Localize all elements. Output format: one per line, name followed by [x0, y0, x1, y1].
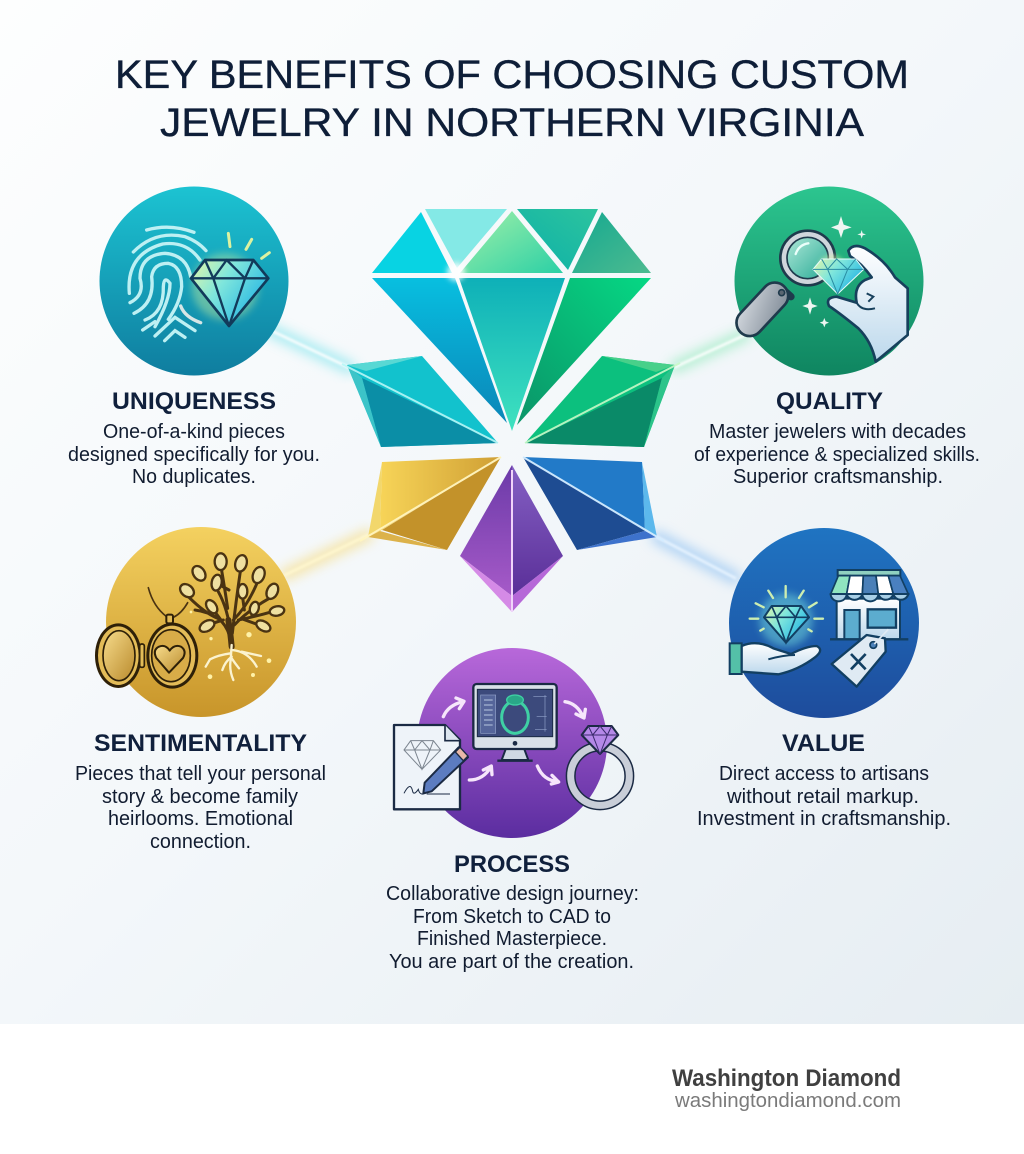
benefit: sentimentality: Pieces that tell your personal — [75, 763, 326, 785]
shard: quality green — [525, 356, 680, 447]
footer band — [0, 1024, 1024, 1154]
icon: process sketch to CAD to ring — [394, 648, 629, 838]
inspected diamond — [813, 254, 864, 294]
benefit: uniqueness — [68, 388, 320, 488]
diamond ring — [571, 726, 629, 805]
sparkle diamond — [191, 233, 269, 326]
open hand — [730, 643, 820, 674]
benefit: uniqueness: UNIQUENESS — [112, 388, 276, 415]
footer brand: washingtondiamond.com — [674, 1090, 901, 1112]
open locket — [95, 615, 198, 689]
benefit: sentimentality: story & become family — [102, 786, 298, 808]
footer brand: Washington Diamond — [672, 1065, 901, 1092]
title: KEY BENEFITS OF CHOOSING CUSTOM — [115, 53, 909, 97]
flow arrows — [443, 698, 585, 784]
price tag with cross — [832, 629, 888, 687]
benefit: uniqueness: designed specifically for you. — [68, 444, 320, 466]
glowing diamond — [750, 586, 823, 647]
benefit: value — [697, 730, 951, 830]
benefit: value: without retail markup. — [726, 786, 919, 808]
title — [115, 53, 909, 145]
benefit: sentimentality: connection. — [150, 831, 251, 853]
gloved hand — [828, 246, 908, 362]
benefit: process: From Sketch to CAD to — [413, 906, 611, 928]
shard: uniqueness teal — [342, 356, 498, 447]
icon: uniqueness fingerprint and diamond — [100, 186, 288, 376]
fingerprint — [129, 227, 206, 341]
sketch paper with pencil — [394, 725, 468, 809]
shard: process purple — [460, 465, 563, 612]
benefit: quality: Master jewelers with decades — [709, 421, 966, 443]
benefit: quality: QUALITY — [776, 388, 883, 415]
benefit: sentimentality: heirlooms. Emotional — [108, 808, 293, 830]
shard: sentimentality gold — [360, 457, 501, 550]
icon: value hand, diamond, shop and tag — [729, 528, 919, 718]
benefit: process: You are part of the creation. — [389, 951, 634, 973]
benefit: process: Finished Masterpiece. — [417, 928, 607, 950]
crown sparkle — [447, 263, 465, 281]
central faceted diamond — [372, 209, 651, 431]
icon: sentimentality locket and family tree — [95, 527, 296, 717]
benefit: uniqueness: One-of-a-kind pieces — [103, 421, 285, 443]
light beams — [270, 330, 745, 655]
benefit: process: Collaborative design journey: — [386, 883, 639, 905]
footer brand — [672, 1065, 901, 1112]
necklace chain — [148, 588, 188, 617]
shard: value blue — [523, 457, 664, 550]
magnifier — [731, 231, 835, 342]
benefit: process — [386, 851, 639, 973]
title: JEWELRY IN NORTHERN VIRGINIA — [160, 101, 864, 145]
benefit: sentimentality — [75, 730, 326, 853]
monitor — [473, 684, 557, 761]
shop — [830, 570, 908, 639]
diamond crown facets — [372, 209, 651, 273]
benefit: uniqueness: No duplicates. — [132, 466, 256, 488]
benefit: quality: Superior craftsmanship. — [733, 466, 943, 488]
benefit: value: Direct access to artisans — [719, 763, 929, 785]
benefit: process: PROCESS — [454, 851, 570, 878]
benefit: value: Investment in craftsmanship. — [697, 808, 951, 830]
benefit: quality: of experience & specialized skills. — [694, 444, 980, 466]
family tree — [177, 553, 285, 680]
diamond pavilion facets — [372, 278, 651, 431]
sparkles — [802, 216, 866, 327]
benefit: value: VALUE — [782, 730, 865, 757]
benefit: quality — [694, 388, 980, 488]
icon: quality magnifier and gloved hand — [731, 186, 924, 376]
benefit: sentimentality: SENTIMENTALITY — [94, 730, 307, 757]
